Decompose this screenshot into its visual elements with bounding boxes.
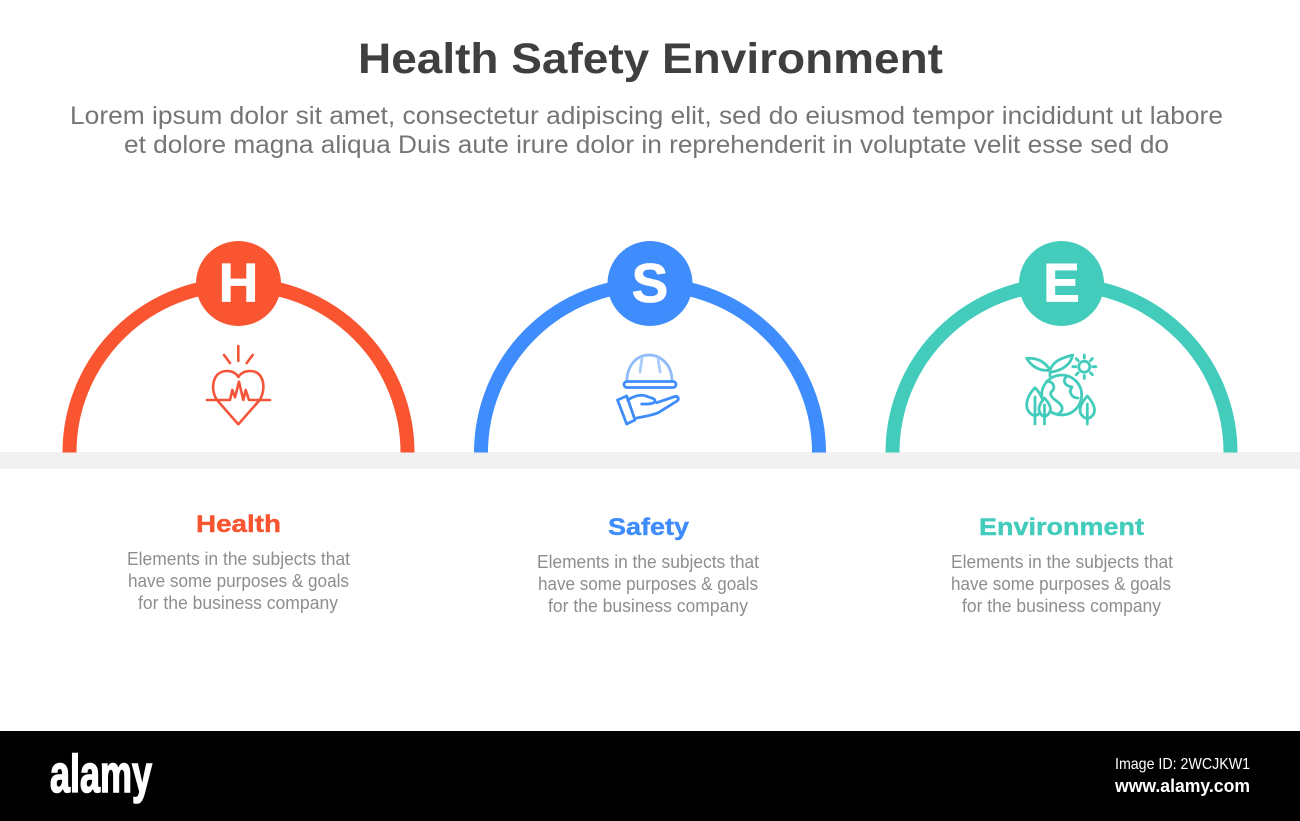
description: Environment	[951, 552, 1173, 616]
icon: heart with pulse	[207, 346, 270, 424]
intro text: et dolore magna aliqua Duis aute irure dolor in reprehenderit in voluptate velit esse sed do	[124, 131, 1169, 159]
description: Health: have some purposes & goals	[128, 571, 349, 591]
label: Safety: Safety	[608, 514, 690, 541]
icon: helmet over hand	[618, 355, 678, 424]
label: Health: Health	[196, 511, 281, 538]
badge: H	[196, 241, 281, 326]
footer logo: alamy	[50, 745, 152, 804]
panel: environment	[892, 241, 1230, 616]
description: Safety: for the business company	[548, 596, 748, 616]
intro text	[70, 102, 1223, 159]
footer bar	[0, 731, 1300, 821]
description: Health: for the business company	[138, 593, 338, 613]
icon: globe with leaves, sun and trees	[1027, 355, 1096, 424]
description: Health: Elements in the subjects that	[127, 549, 350, 569]
website: www.alamy.com	[1114, 776, 1250, 796]
image id: Image ID: 2WCJKW1	[1115, 756, 1250, 773]
description: Health	[127, 549, 350, 613]
arc: health	[70, 284, 408, 452]
badge: S	[608, 241, 692, 326]
baseline band	[0, 452, 1300, 469]
panel: health	[70, 241, 408, 613]
arc: safety	[481, 285, 819, 452]
description: Safety: Elements in the subjects that	[537, 552, 759, 572]
intro text: Lorem ipsum dolor sit amet, consectetur adipiscing elit, sed do eiusmod tempor incididunt ut labore	[70, 102, 1223, 130]
description: Safety	[537, 552, 759, 616]
badge: E: E	[1043, 252, 1080, 314]
description: Environment: have some purposes & goals	[951, 574, 1171, 594]
badge: H: H	[219, 252, 258, 314]
description: Safety: have some purposes & goals	[538, 574, 758, 594]
description: Environment: for the business company	[962, 596, 1161, 616]
label: Environment: Environment	[979, 514, 1144, 541]
description: Environment: Elements in the subjects that	[951, 552, 1173, 572]
panel: safety	[481, 241, 819, 616]
arc: environment	[892, 284, 1230, 452]
badge: S: S	[632, 252, 668, 314]
badge: E	[1019, 241, 1104, 326]
title: Health Safety Environment	[358, 35, 943, 83]
